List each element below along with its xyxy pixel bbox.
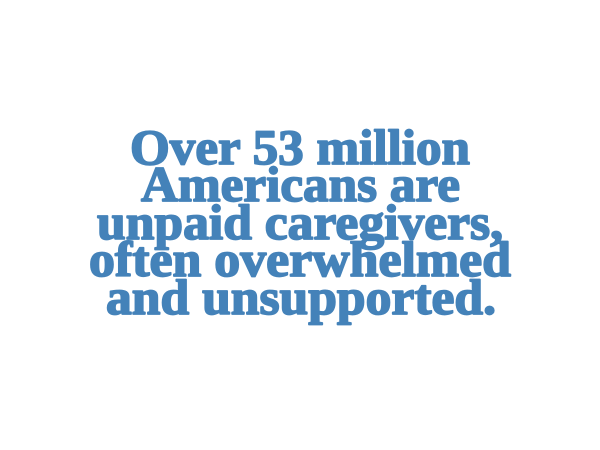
heading: caregiver statement: Americans are — [141, 156, 460, 212]
heading: caregiver statement: and unsupported. — [106, 269, 496, 325]
heading: caregiver statement — [89, 119, 511, 325]
heading: caregiver statement: often overwhelmed — [89, 231, 511, 287]
heading: caregiver statement: Over 53 million — [130, 119, 470, 175]
heading: caregiver statement: unpaid caregivers, — [97, 194, 503, 250]
